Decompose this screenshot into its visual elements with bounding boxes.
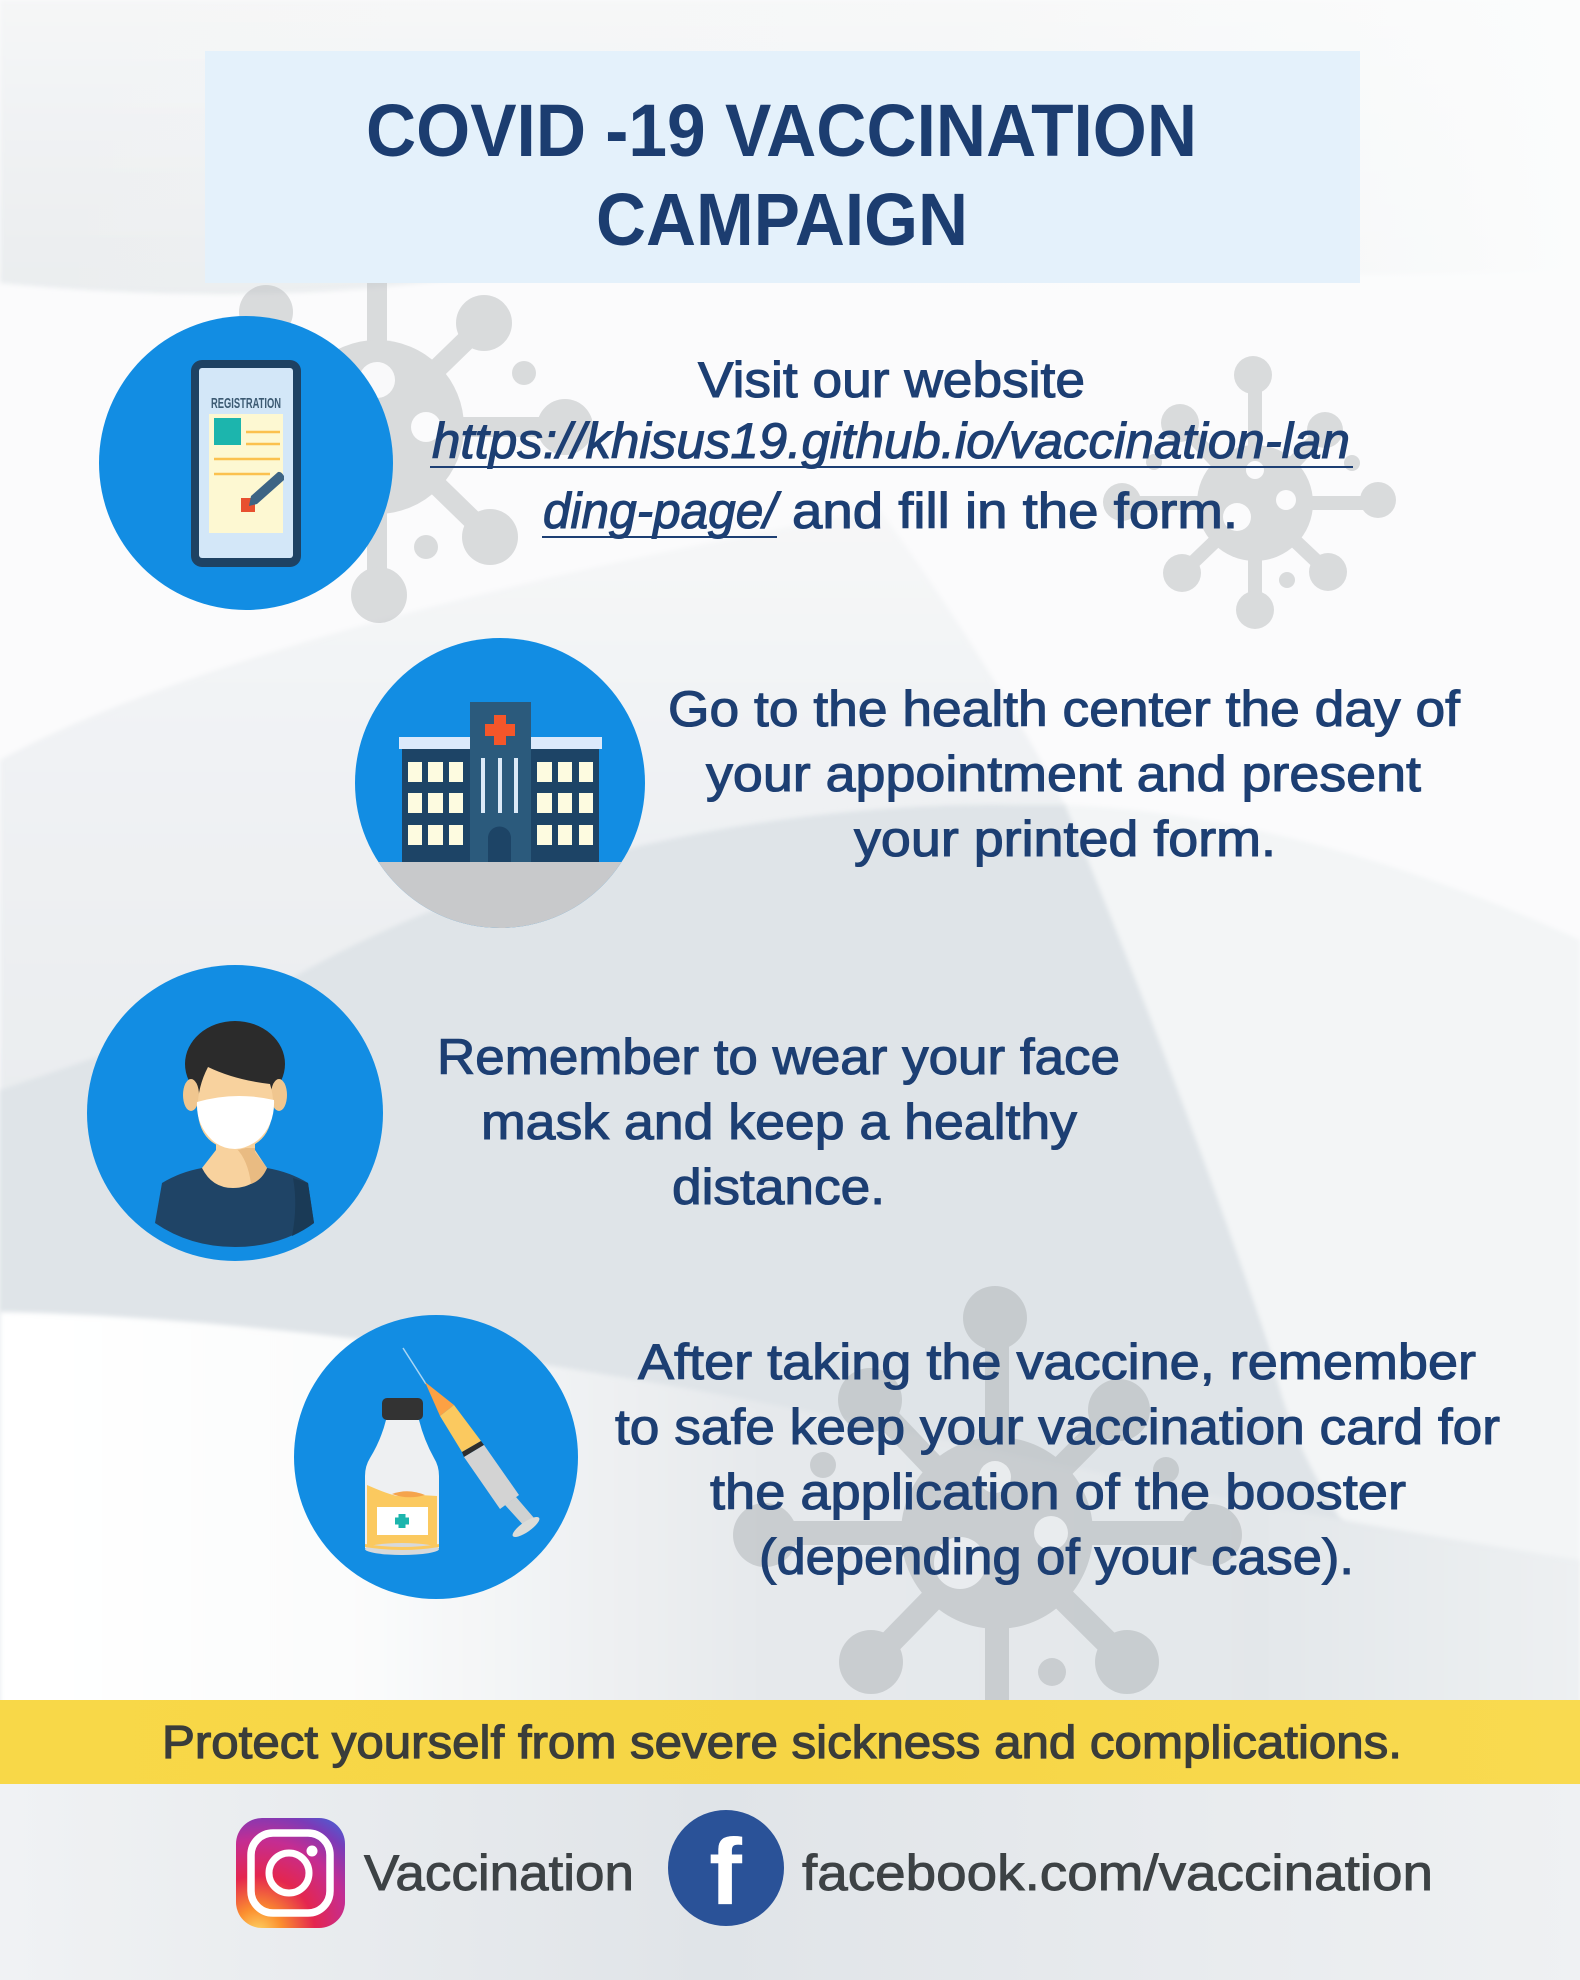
step 4 text: the application of the booster: [710, 1464, 1406, 1520]
step 4 text: to safe keep your vaccination card for: [615, 1399, 1500, 1455]
facebook address: facebook.com/vaccination: [802, 1845, 1433, 1901]
title: [366, 89, 1197, 261]
step 3 text: distance.: [672, 1159, 885, 1215]
step 4 text: [615, 1334, 1500, 1585]
virus: bottom: [733, 1286, 1242, 1700]
title: CAMPAIGN: [596, 178, 968, 261]
virus: top right: [1103, 356, 1396, 629]
title panel: [205, 51, 1360, 283]
step 1 text: [430, 352, 1353, 539]
virus: top left: [239, 283, 593, 623]
yellow banner: [0, 1700, 1580, 1784]
icon: instagram: [236, 1818, 345, 1928]
step 1 text: https://khisus19.github.io/vaccination-lan: [432, 413, 1350, 469]
step 4 icon: vaccine bottle and syringe: [294, 1315, 578, 1599]
yellow banner: Protect yourself from severe sickness and complications.: [162, 1716, 1402, 1768]
step 1 text: ding-page/: [543, 483, 782, 539]
instagram handle: Vaccination: [364, 1845, 634, 1901]
step 2 text: [668, 681, 1460, 867]
icon: facebook: f: [709, 1819, 743, 1924]
step 1 icon: phone registration: [99, 316, 393, 610]
icon: facebook: [668, 1810, 784, 1926]
step 3 text: mask and keep a healthy: [481, 1094, 1077, 1150]
step 1 text: Visit our website: [698, 352, 1085, 408]
step 3 text: Remember to wear your face: [437, 1029, 1120, 1085]
step 2 text: your printed form.: [854, 811, 1276, 867]
step 3 icon: person with mask: [87, 965, 383, 1261]
step 1 text: and fill in the form.: [792, 483, 1238, 539]
step 4 text: After taking the vaccine, remember: [638, 1334, 1476, 1390]
step 1 icon: phone registration: REGISTRATION: [211, 395, 281, 412]
step 4 text: (depending of your case).: [759, 1529, 1354, 1585]
step 3 text: [437, 1029, 1120, 1215]
step 2 icon: hospital: [350, 638, 650, 932]
title: COVID -19 VACCINATION: [366, 89, 1197, 172]
step 2 text: Go to the health center the day of: [668, 681, 1460, 737]
step 2 text: your appointment and present: [706, 746, 1421, 802]
